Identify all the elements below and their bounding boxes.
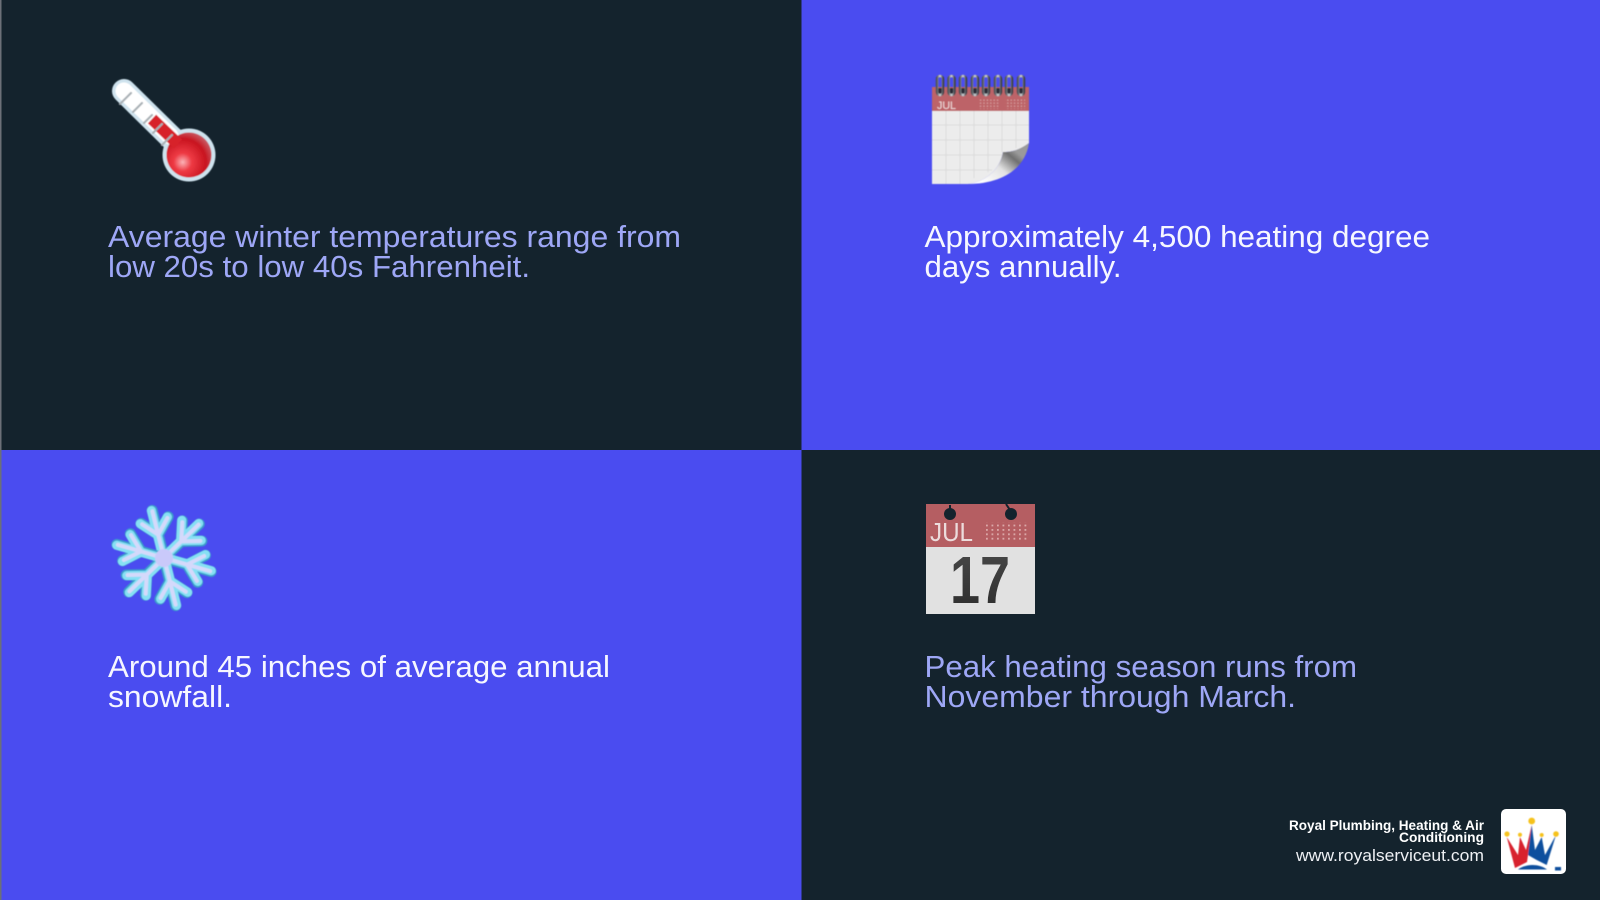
company name and website: Royal Plumbing, Heating & Air <box>1289 818 1485 833</box>
icon: spiral calendar <box>932 76 1029 184</box>
text: peak heating season: November through March. <box>924 679 1296 714</box>
icon: tear-off calendar: JUL <box>930 517 973 547</box>
company name and website: www.royalserviceut.com <box>1295 847 1484 865</box>
icon: tear-off calendar <box>926 504 1035 618</box>
company name and website <box>1289 818 1485 865</box>
text: winter temperatures: Average winter temperatures range from <box>108 219 681 254</box>
icon: tear-off calendar: 17 <box>950 543 1010 618</box>
text: winter temperatures <box>108 219 681 284</box>
text: heating degree days <box>924 219 1430 284</box>
panel: peak heating season <box>802 450 1600 900</box>
text: annual snowfall <box>108 649 610 714</box>
text: annual snowfall: snowfall. <box>108 679 232 714</box>
text: peak heating season: Peak heating season runs from <box>924 649 1357 684</box>
text: annual snowfall: Around 45 inches of average annual <box>108 649 610 684</box>
icon: snowflake <box>113 507 215 609</box>
panel: annual snowfall <box>2 450 802 900</box>
panel: winter temperatures <box>2 0 802 450</box>
text: peak heating season <box>924 649 1357 714</box>
text: winter temperatures: low 20s to low 40s Fahrenheit. <box>108 249 530 284</box>
panel: heating degree days <box>802 0 1600 450</box>
icon: spiral calendar: JUL <box>937 100 956 112</box>
text: heating degree days: Approximately 4,500 heating degree <box>924 219 1430 254</box>
text: heating degree days: days annually. <box>924 249 1122 284</box>
company name and website: Conditioning <box>1399 830 1484 845</box>
logo: crown <box>1501 809 1566 874</box>
icon: thermometer <box>120 91 216 182</box>
